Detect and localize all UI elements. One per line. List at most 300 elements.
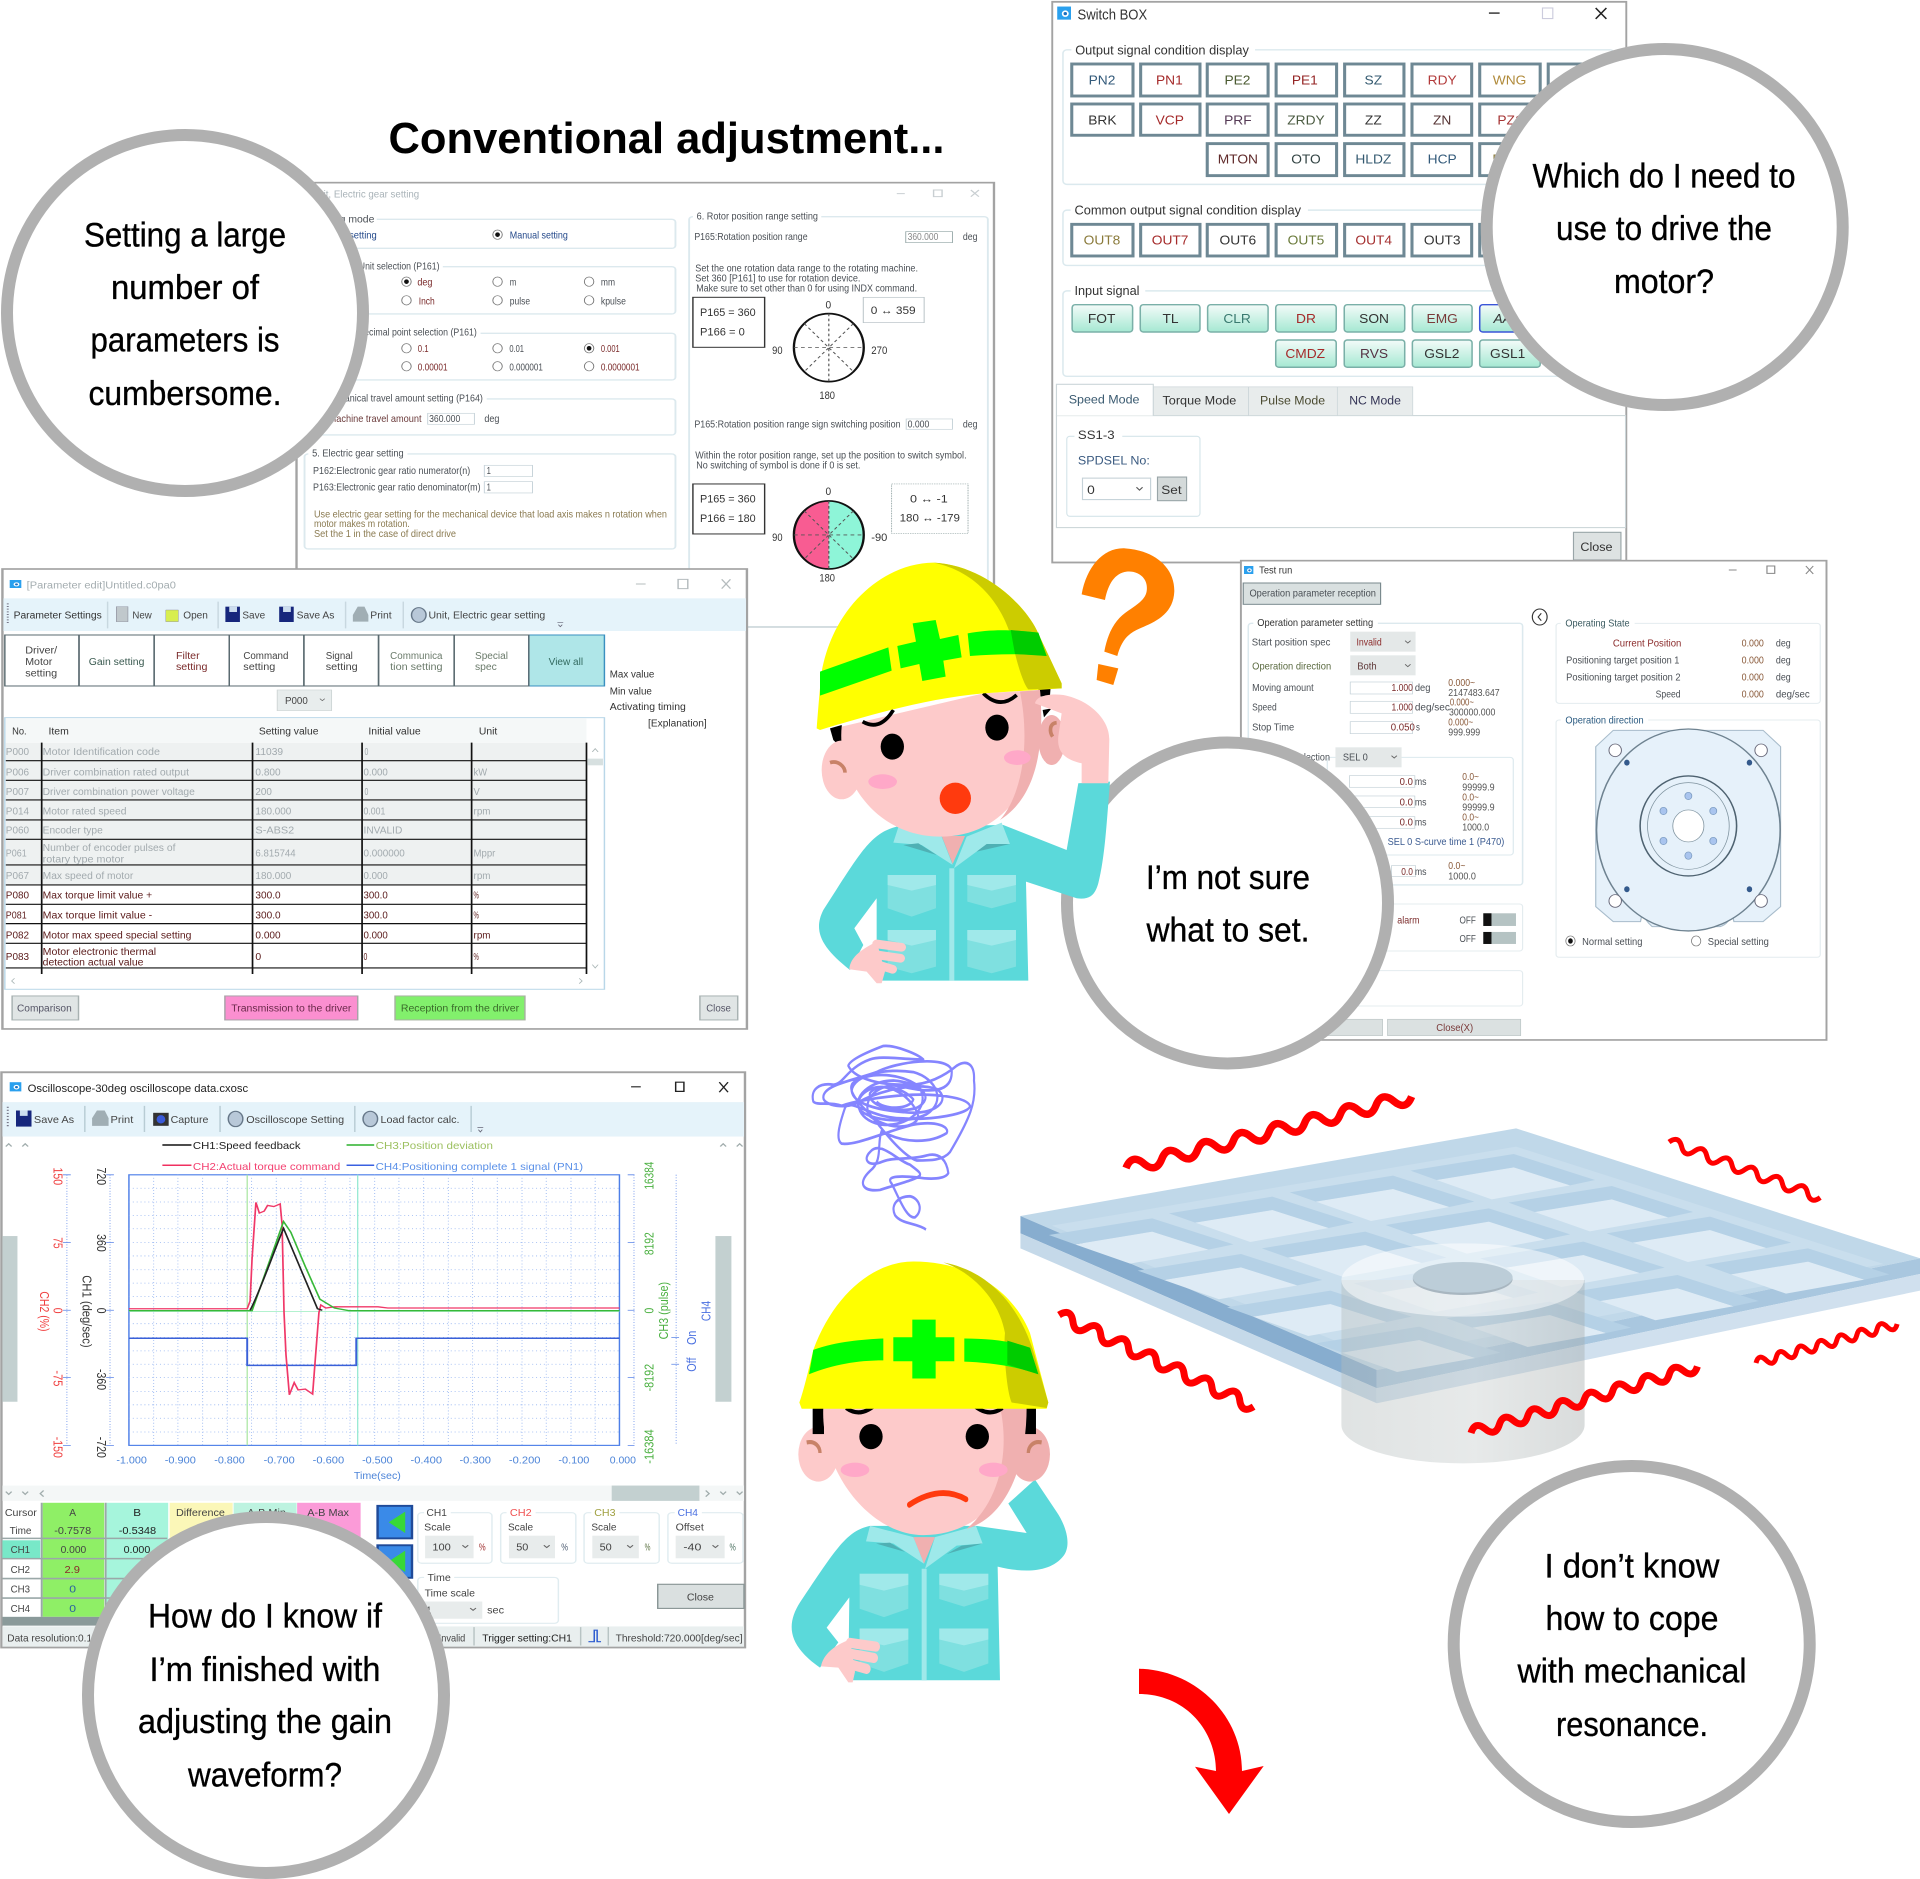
editable rows: Max torque limit value + xyxy=(43,890,152,901)
right axis labels: 8192 xyxy=(642,1232,657,1255)
chart legend: CH3:Position deviation xyxy=(376,1140,493,1151)
group: input signal: CLR xyxy=(1223,311,1251,326)
group: output signal condition display: PZ2 xyxy=(1492,152,1518,167)
worker 2: troubled xyxy=(792,1261,1068,1682)
channel scale controls: % xyxy=(645,1542,651,1553)
x axis labels: -0.900 xyxy=(165,1455,196,1466)
x axis labels: -1.000 xyxy=(116,1455,147,1466)
speech bubble: parameters: Setting a large xyxy=(84,217,286,255)
speech bubble: mechanical resonance: with mechanical xyxy=(1517,1653,1746,1691)
x axis labels xyxy=(116,1455,636,1482)
read-only rows: Number of encoder pulses of xyxy=(43,842,176,853)
read-only rows: kW xyxy=(474,766,487,778)
toolbar: Open xyxy=(183,610,208,621)
s-curve selection: 0.0 xyxy=(1400,817,1413,828)
read-only rows: Encoder type xyxy=(43,825,103,836)
parameter table: Item xyxy=(48,726,69,737)
left axis labels: 150 xyxy=(50,1168,64,1186)
operation parameter setting: Invalid xyxy=(1356,637,1382,648)
read-only rows: rpm xyxy=(474,870,491,881)
collapse arrow xyxy=(1532,609,1547,625)
s-curve selection: 99999.9 xyxy=(1462,802,1495,813)
operating state: 0.000 xyxy=(1742,672,1764,683)
mechanical travel amount: Mechanical travel amount setting (P164) xyxy=(323,393,483,404)
group: common output signal condition display: OUT6 xyxy=(1220,233,1256,248)
electric gear inputs: 1 xyxy=(487,481,491,493)
rotor dial diagram 2: P165 = 360 xyxy=(700,492,756,505)
rotor position range text: P165:Rotation position range sign switching position xyxy=(694,418,901,430)
close button: Close xyxy=(1580,540,1613,554)
s-curve selection: ms xyxy=(1415,867,1426,878)
category tabs: setting xyxy=(176,661,207,672)
channel scale controls: Scale xyxy=(424,1522,451,1533)
channel scale controls: 100 xyxy=(432,1542,451,1553)
cylinder top xyxy=(1341,1243,1584,1317)
speech bubble: what to set: what to set. xyxy=(1146,912,1310,950)
setting mode: Auto setting xyxy=(327,229,377,241)
editable rows: P083 xyxy=(6,951,29,962)
operating state: Operating State xyxy=(1565,618,1630,629)
unit selection: deg xyxy=(417,277,432,288)
parameter dropdown xyxy=(277,690,332,711)
operating state: Current Position xyxy=(1613,638,1681,649)
toolbar xyxy=(3,598,746,631)
s-curve selection: 0.0~ xyxy=(1462,792,1479,803)
s-curve selection: 0.0 xyxy=(1400,797,1413,808)
head xyxy=(822,687,1065,837)
decimal point selection: 0.001 xyxy=(601,343,620,354)
x axis labels: -0.300 xyxy=(459,1455,491,1466)
operation parameter setting: 300000.000 xyxy=(1449,707,1495,718)
operation parameter setting: Both xyxy=(1357,661,1377,672)
operation parameter setting: 2147483.647 xyxy=(1448,688,1500,699)
operating state xyxy=(1556,618,1820,703)
speed selection panel: SS1-3 xyxy=(1078,429,1115,442)
channel scale controls: % xyxy=(729,1542,736,1553)
mechanical travel amount xyxy=(308,393,499,424)
editable rows: detection actual value xyxy=(43,957,144,968)
category tabs xyxy=(5,635,604,686)
status bar: Threshold:720.000[deg/sec] xyxy=(616,1633,743,1644)
speed selection panel: SPDSEL No: xyxy=(1078,454,1150,468)
operation parameter setting: 999.999 xyxy=(1448,727,1480,738)
rotor dial diagram 2: 180 xyxy=(819,571,835,584)
alarm toggles: OFF xyxy=(1460,915,1476,926)
parameter explanation labels xyxy=(610,669,707,729)
operation parameter setting: 0.000~ xyxy=(1448,678,1475,689)
rotor dial diagram 1: P165 = 360 xyxy=(700,305,756,318)
operation parameter setting: Moving amount xyxy=(1252,683,1314,694)
hard hat xyxy=(817,563,1062,730)
operation direction panel: Special setting xyxy=(1708,937,1769,948)
title: Conventional adjustment... xyxy=(388,114,944,163)
toolbar: Capture xyxy=(171,1114,209,1126)
read-only rows: S-ABS2 xyxy=(255,825,294,836)
read-only rows: 0.001 xyxy=(364,806,385,817)
read-only rows: Motor Identification code xyxy=(43,746,160,757)
category tabs: setting xyxy=(243,661,275,672)
hand xyxy=(821,1639,876,1682)
rotor position range text: Set 360 [P161] to use for rotation device. xyxy=(695,273,860,284)
operating state: deg xyxy=(1776,655,1791,666)
operation parameter setting: 0.000~ xyxy=(1450,697,1474,708)
rotor position range text: Set the one rotation data range to the rotating machine. xyxy=(695,263,918,274)
speech bubble: parameters xyxy=(7,135,363,491)
mechanical travel amount: deg xyxy=(484,413,499,424)
series ch4 xyxy=(129,1338,619,1365)
electric gear inputs: P162:Electronic gear ratio numerator(n) xyxy=(313,465,470,476)
reception button xyxy=(395,996,525,1020)
speech bubble: drive the motor: Which do I need to xyxy=(1532,158,1796,196)
operating state: 0.000 xyxy=(1742,655,1764,666)
group: input signal: GSL2 xyxy=(1424,346,1459,361)
s-curve selection: ms xyxy=(1415,817,1426,828)
category tabs: Communica xyxy=(390,650,443,661)
parameter explanation labels: Max value xyxy=(610,669,654,680)
electric gear inputs xyxy=(308,448,667,539)
cursor table: 0 xyxy=(69,1584,77,1595)
channel scale controls: 50 xyxy=(516,1542,529,1553)
editable rows: 0.000 xyxy=(364,929,388,941)
read-only rows: P061 xyxy=(6,847,27,859)
editable rows: 0 xyxy=(364,951,367,962)
operation parameter setting: Operation direction xyxy=(1252,661,1331,672)
operation parameter setting: Speed xyxy=(1252,702,1277,713)
icon: tangled scribble xyxy=(813,1046,975,1230)
speech bubble: what to set xyxy=(1067,742,1388,1064)
transmission button xyxy=(225,996,358,1020)
toolbar: Save As xyxy=(34,1114,74,1126)
operation parameter setting: Stop Time xyxy=(1252,722,1294,733)
series ch3 xyxy=(129,1221,619,1311)
status bar: Trigger setting:CH1 xyxy=(482,1633,572,1644)
group: output signal condition display: PN1 xyxy=(1156,73,1183,87)
category tabs: setting xyxy=(326,661,358,672)
rotor position range text: 6. Rotor position range setting xyxy=(697,210,818,222)
read-only rows: Motor rated speed xyxy=(43,806,127,817)
left axis labels: 0 xyxy=(94,1308,108,1314)
left axis labels: 75 xyxy=(50,1237,64,1249)
unit selection: Unit selection (P161) xyxy=(359,260,440,272)
window controls xyxy=(897,190,979,197)
left axis labels: 0 xyxy=(50,1308,64,1314)
toolbar: Print xyxy=(370,610,392,621)
right axis labels: Off xyxy=(685,1357,699,1372)
group: common output signal condition display: OUT5 xyxy=(1288,233,1324,248)
group: input signal: EMG xyxy=(1427,311,1458,326)
group: output signal condition display: SZ xyxy=(1365,73,1382,87)
rotor dial diagram 1: P166 = 0 xyxy=(700,325,745,338)
category tabs: Command xyxy=(243,650,288,661)
hip hand xyxy=(849,942,902,983)
rotor dial diagram 2: 180 ↔ -179 xyxy=(900,511,960,524)
channel scale controls: CH4 xyxy=(678,1507,698,1519)
left axis labels xyxy=(37,1168,108,1458)
vibration squiggles xyxy=(1059,1097,1897,1433)
read-only rows: P014 xyxy=(6,806,29,817)
operating state: Speed xyxy=(1656,689,1681,700)
operating state: deg/sec xyxy=(1776,689,1810,700)
editable rows: 300.0 xyxy=(255,910,281,921)
group: output signal condition display: PN2 xyxy=(1089,73,1115,87)
cursor table: A-B Max xyxy=(307,1507,349,1519)
x axis labels: -0.400 xyxy=(411,1455,442,1466)
left axis labels: -720 xyxy=(94,1437,108,1458)
rotor position range text: deg xyxy=(963,231,977,242)
electric gear inputs: Set the 1 in the case of direct drive xyxy=(314,528,456,539)
channel scale controls: -40 xyxy=(683,1542,702,1553)
group: output signal condition display: ZRDY xyxy=(1287,113,1325,127)
group: output signal condition display: PE2 xyxy=(1224,73,1250,87)
rotor dial diagram 1: 180 xyxy=(819,388,835,401)
x axis labels: 0.000 xyxy=(610,1455,636,1466)
operating state: 0.000 xyxy=(1742,689,1764,700)
editable rows: % xyxy=(474,910,479,921)
group: output signal condition display: BRK xyxy=(1088,113,1117,127)
speech bubble: gain waveform: waveform? xyxy=(187,1757,342,1795)
plot scrollbars xyxy=(2,1144,744,1501)
x axis labels: -0.200 xyxy=(509,1455,541,1466)
mode tabs: Speed Mode xyxy=(1069,393,1140,407)
rotor position range text: No switching of symbol is done if 0 is set. xyxy=(696,459,860,471)
group: output signal condition display: PE1 xyxy=(1292,73,1318,87)
decimal point selection: 0.00001 xyxy=(418,361,448,373)
read-only rows: rotary type motor xyxy=(43,853,124,865)
decimal point selection: 0.000001 xyxy=(509,361,543,373)
rotor position range text: 360.000 xyxy=(908,231,939,242)
decimal point selection: 0.1 xyxy=(418,343,429,354)
window controls xyxy=(1729,566,1813,574)
window: oscilloscope xyxy=(1,1072,745,1647)
speed selection panel: 0 xyxy=(1087,483,1095,497)
editable rows: P080 xyxy=(6,890,29,901)
category tabs: tion setting xyxy=(390,661,443,672)
channel scale controls: Time xyxy=(428,1572,451,1584)
operating state: Positioning target position 1 xyxy=(1566,655,1680,666)
cursor table: Time xyxy=(10,1525,32,1536)
x axis labels: -0.700 xyxy=(264,1455,295,1466)
editable rows: % xyxy=(474,951,479,962)
group: output signal condition display: PRF xyxy=(1224,113,1252,127)
channel scale controls xyxy=(418,1507,743,1623)
s-curve selection: 0.0~ xyxy=(1448,861,1465,872)
x axis labels: -0.600 xyxy=(313,1455,345,1466)
rotor position range text xyxy=(693,210,977,471)
group: output signal condition display: Output signal condition display xyxy=(1075,43,1249,57)
read-only rows: INVALID xyxy=(364,825,402,836)
x axis labels: -0.100 xyxy=(558,1455,590,1466)
group: input signal: DR xyxy=(1296,311,1316,326)
read-only rows: 0.000 xyxy=(364,870,388,881)
mode tabs: Pulse Mode xyxy=(1260,394,1325,408)
speech bubble: drive the motor: use to drive the xyxy=(1556,210,1772,248)
close button row xyxy=(1327,1019,1521,1036)
category tabs: spec xyxy=(475,661,497,672)
right axis labels xyxy=(642,1161,714,1464)
window title: Switch BOX xyxy=(1078,7,1147,23)
mode tabs xyxy=(1056,384,1626,528)
setting mode: Manual setting xyxy=(510,229,568,241)
read-only rows: Driver combination rated output xyxy=(43,766,189,778)
editable rows: 300.0 xyxy=(364,890,388,901)
group: input signal: CMDZ xyxy=(1285,346,1325,361)
read-only rows: P000 xyxy=(6,746,29,757)
speech bubble: mechanical resonance: I don’t know xyxy=(1544,1548,1720,1586)
read-only rows: P006 xyxy=(6,766,29,778)
electric gear inputs: motor makes m rotation. xyxy=(314,518,410,529)
editable rows: Motor electronic thermal xyxy=(43,946,156,957)
operating state: deg xyxy=(1776,672,1791,683)
group: input signal: RVS xyxy=(1360,346,1388,361)
decimal point selection xyxy=(308,327,640,373)
rotor dial diagram 2: P166 = 180 xyxy=(700,511,756,524)
parameter explanation labels: Activating timing xyxy=(610,701,686,712)
read-only rows: P067 xyxy=(6,870,29,881)
rotor dial diagram 1: 270 xyxy=(871,343,888,356)
s-curve selection: 0.0 xyxy=(1401,867,1413,878)
cursor table: B xyxy=(133,1507,141,1519)
speech bubble: gain waveform: adjusting the gain xyxy=(138,1703,392,1741)
read-only rows: 0.000000 xyxy=(364,847,405,859)
rotor position range text: P165:Rotation position range xyxy=(694,231,808,242)
category tabs: Signal xyxy=(326,650,353,661)
s-curve selection: 0.0~ xyxy=(1462,812,1479,823)
right axis labels: 0 xyxy=(642,1307,657,1314)
toolbar: Load factor calc. xyxy=(380,1114,459,1126)
rotor dial diagram 2: -90 xyxy=(871,530,888,543)
close button: Close xyxy=(706,1003,731,1014)
channel scale controls: Scale xyxy=(591,1522,617,1533)
cylinder base xyxy=(1341,1280,1585,1463)
read-only rows: 200 xyxy=(255,786,272,797)
window: electric gear setting xyxy=(297,183,994,627)
parameter table: Setting value xyxy=(259,726,318,737)
icon: motor flange xyxy=(1596,729,1781,931)
operation parameter setting: 1.000 xyxy=(1391,702,1413,713)
icon: app logo xyxy=(1057,7,1071,20)
category tabs: Motor xyxy=(25,656,52,667)
speech bubble: mechanical resonance xyxy=(1454,1466,1810,1822)
read-only rows xyxy=(6,746,495,881)
left axis labels: 360 xyxy=(94,1234,108,1252)
cursor table: 0 xyxy=(69,1603,77,1615)
operation parameter setting: 0.050 xyxy=(1391,722,1415,733)
window title: Test run xyxy=(1259,565,1292,576)
toolbar: New xyxy=(132,610,152,621)
group boxes xyxy=(305,217,988,627)
group: common output signal condition display: OUT4 xyxy=(1355,233,1393,248)
channel scale controls: Offset xyxy=(676,1522,704,1533)
decimal point selection: Decimal point selection (P161) xyxy=(358,327,477,338)
operation direction panel xyxy=(1556,715,1820,957)
read-only rows: 6.815744 xyxy=(255,847,296,859)
speech bubble: gain waveform: I’m finished with xyxy=(150,1651,380,1689)
channel scale controls: 1 xyxy=(427,1605,431,1616)
speech bubble: gain waveform xyxy=(88,1517,444,1873)
icon: red curved arrow xyxy=(1139,1669,1264,1814)
body xyxy=(819,782,1110,981)
cursor table: A-B Min xyxy=(247,1507,286,1519)
group: common output signal condition display: OUT7 xyxy=(1152,233,1188,248)
alarm toggles: OFF xyxy=(1460,934,1476,945)
mode tabs: NC Mode xyxy=(1349,394,1401,408)
cursor table: A xyxy=(69,1507,76,1519)
toolbar: Oscilloscope Setting xyxy=(246,1114,344,1126)
speech bubble: parameters: parameters is xyxy=(90,322,280,360)
reception button: Reception from the driver xyxy=(401,1003,519,1014)
s-curve selection: 1000.0 xyxy=(1462,822,1489,833)
right axis labels: CH3 (pulse) xyxy=(657,1282,671,1339)
decimal point selection: 0.0000001 xyxy=(601,361,640,373)
read-only rows: rpm xyxy=(474,806,491,817)
raised hand xyxy=(1035,695,1109,783)
category tabs: Filter xyxy=(176,650,200,661)
group: common output signal condition display: OUT3 xyxy=(1424,233,1461,248)
speech bubble: drive the motor: motor? xyxy=(1614,263,1714,301)
right axis labels: -8192 xyxy=(642,1364,657,1391)
toolbar: Parameter Settings xyxy=(14,610,102,621)
s-curve selection: ms xyxy=(1415,777,1426,788)
channel scale controls: 50 xyxy=(600,1542,612,1553)
speech bubble: what to set: I’m not sure xyxy=(1146,859,1310,897)
left axis labels: 720 xyxy=(94,1168,108,1186)
s-curve selection: 99999.9 xyxy=(1462,782,1495,793)
operation parameter setting: s xyxy=(1416,722,1420,733)
read-only rows: Mppr xyxy=(474,847,495,859)
cursor table: CH1 xyxy=(11,1544,30,1556)
window: test run xyxy=(1241,561,1826,1040)
unit selection: pulse xyxy=(510,295,530,307)
group: common output signal condition display: Common output signal condition display xyxy=(1074,203,1301,217)
window title: Unit, Electric gear setting xyxy=(311,188,419,200)
channel scale controls: CH3 xyxy=(594,1507,616,1519)
toolbar xyxy=(2,1102,744,1137)
parameter table xyxy=(5,718,604,989)
speed selection panel xyxy=(1067,429,1200,516)
alarm toggles: alarm xyxy=(1397,915,1420,926)
s-curve selection: 0.0~ xyxy=(1462,772,1479,783)
category tabs: View all xyxy=(549,656,583,667)
category tabs: Gain setting xyxy=(89,656,144,667)
rotor position range text: 0.000 xyxy=(908,418,930,430)
toolbar: Save As xyxy=(297,610,334,621)
s-curve selection: 0.0 xyxy=(1400,777,1413,788)
s-curve selection: 1000.0 xyxy=(1448,871,1476,882)
read-only rows: 0.000 xyxy=(364,766,388,778)
operation parameter setting: Start position spec xyxy=(1252,637,1330,648)
window controls xyxy=(636,579,730,589)
cursor table: Difference xyxy=(176,1507,225,1519)
editable rows: Max torque limit value - xyxy=(43,910,152,921)
group: output signal condition display: OTO xyxy=(1291,152,1321,167)
cursor table: Cursor xyxy=(5,1507,37,1519)
close button xyxy=(1573,532,1621,560)
cursor table: -0.7578 xyxy=(54,1525,92,1536)
window title: [Parameter edit]Untitled.c0pa0 xyxy=(27,580,176,591)
cursor table: CH3 xyxy=(11,1584,30,1595)
operation parameter setting: deg/sec xyxy=(1415,702,1450,713)
window controls xyxy=(631,1082,728,1092)
x axis labels: Time(sec) xyxy=(354,1470,401,1482)
speech bubble: mechanical resonance: how to cope xyxy=(1546,1600,1718,1638)
parameter table: Unit xyxy=(479,726,498,737)
speech bubble: parameters: cumbersome. xyxy=(88,375,282,413)
read-only rows: 0 xyxy=(364,786,368,797)
operation parameter setting: Operation parameter setting xyxy=(1257,618,1373,629)
read-only rows: P060 xyxy=(6,825,29,836)
mechanical travel amount: Machine travel amount xyxy=(329,413,422,424)
rotor dial diagram 1: 0 ↔ 359 xyxy=(871,303,916,316)
